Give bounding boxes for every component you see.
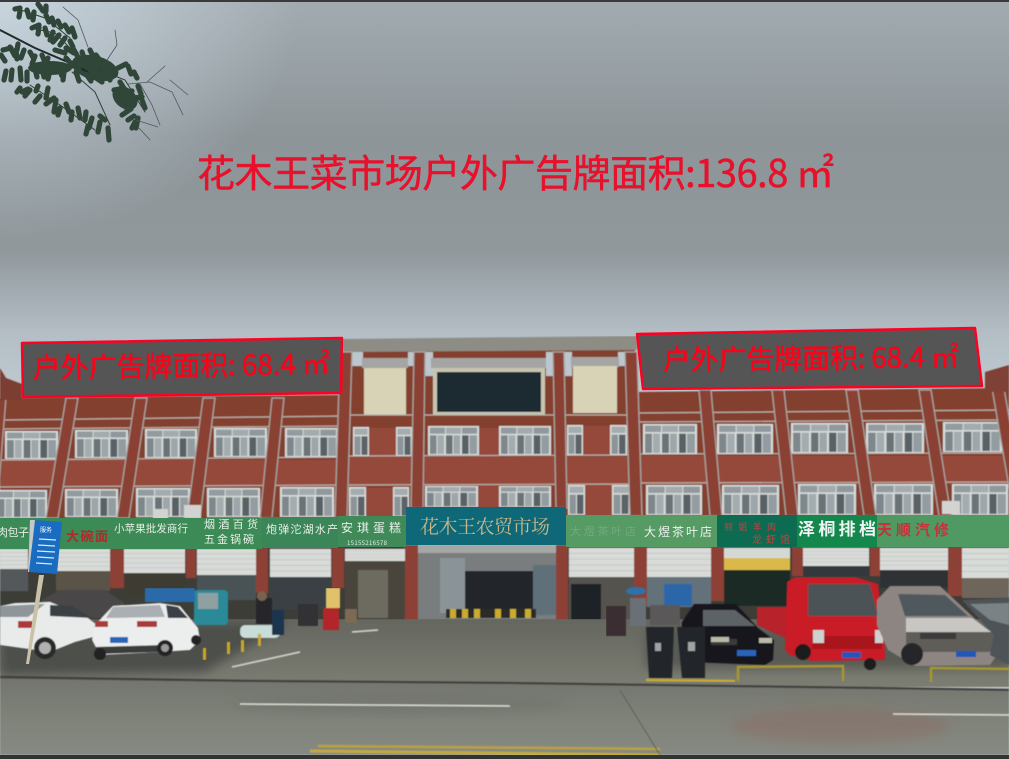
dark car at edge [962, 598, 1009, 665]
building [0, 336, 1009, 522]
shop signs right: 天顺汽修 [877, 519, 949, 540]
parked vehicles right [606, 577, 1009, 682]
blue road sign: 服务 [40, 525, 52, 534]
shop signs right: 大煜茶叶店 [570, 523, 636, 539]
shutters [0, 548, 1009, 578]
parked vehicles left [0, 588, 357, 660]
black car [680, 604, 774, 665]
facade [0, 350, 1009, 522]
white car 1 [0, 602, 97, 659]
shop signs right: 丽姐羊肉 [724, 520, 776, 533]
tower openings [347, 352, 630, 376]
road markings [240, 704, 510, 706]
market sign [406, 507, 566, 545]
bollards [203, 634, 261, 660]
billboard panel left [362, 358, 408, 415]
label: right billboard area [637, 328, 982, 389]
pillars [0, 352, 1009, 520]
billboard panel right [571, 357, 619, 413]
grey van [877, 586, 997, 666]
wet parking shade left [0, 622, 290, 676]
upper windows [5, 422, 1002, 459]
blue stall [145, 588, 195, 602]
shop signs left: 安琪蛋糕 [341, 519, 401, 536]
right edge of roof [985, 365, 1009, 392]
label: left billboard area [22, 338, 342, 397]
shop signs right [566, 515, 1009, 547]
shop fronts [0, 569, 28, 591]
blue tricycle [194, 590, 228, 625]
white car 2 [92, 603, 201, 660]
ledger lines [0, 410, 1009, 487]
road wet patches [730, 707, 950, 743]
tree branch [0, 4, 188, 140]
roof slab [343, 336, 637, 352]
plaza [0, 619, 1009, 687]
brick bands [0, 426, 1009, 517]
LED screen [431, 358, 546, 415]
label: right billboard area: 户外广告牌面积: 68.4 ㎡ [663, 336, 959, 379]
shop signs left: 炮弹沱湖水产 [266, 521, 338, 537]
dark SUV [42, 590, 124, 618]
shop signs left: 大碗面 [66, 526, 108, 545]
left edge of roof [0, 368, 22, 400]
shop signs left: 烟酒百货 [204, 516, 258, 532]
red columns [108, 545, 962, 621]
parking shade right [645, 628, 1009, 668]
motorcycles [298, 588, 357, 630]
parking line and rails [646, 680, 735, 681]
red truck [757, 577, 885, 670]
blue road sign [26, 520, 62, 664]
shop signs right: 龙虾馆 [752, 531, 790, 546]
yellow barriers [738, 666, 1009, 682]
road [0, 679, 1009, 755]
scooter with rider [240, 591, 284, 638]
shop signs left: 15155216578 [347, 538, 388, 547]
shop signs left [0, 516, 406, 549]
shop signs right: 大煜茶叶店 [644, 523, 712, 540]
market entrance [418, 545, 556, 621]
ground floor shops [0, 545, 1009, 635]
ground [0, 619, 1009, 755]
bottom edge [0, 755, 1009, 759]
shop signs left: 五金锅碗 [204, 531, 254, 547]
parasol and scooters [606, 587, 680, 636]
label: left billboard area: 户外广告牌面积: 68.4 ㎡ [33, 343, 330, 387]
trash bins [646, 627, 705, 678]
title: 花木王菜市场户外广告牌面积:136.8 ㎡ [197, 143, 834, 198]
dark curb line [0, 677, 1009, 690]
lower windows [0, 484, 1008, 518]
shop signs left: 小苹果批发商行 [114, 521, 188, 536]
air conditioners [153, 501, 960, 519]
shop signs right: 泽桐排档 [798, 515, 876, 540]
market sign: 花木王农贸市场 [420, 512, 550, 539]
